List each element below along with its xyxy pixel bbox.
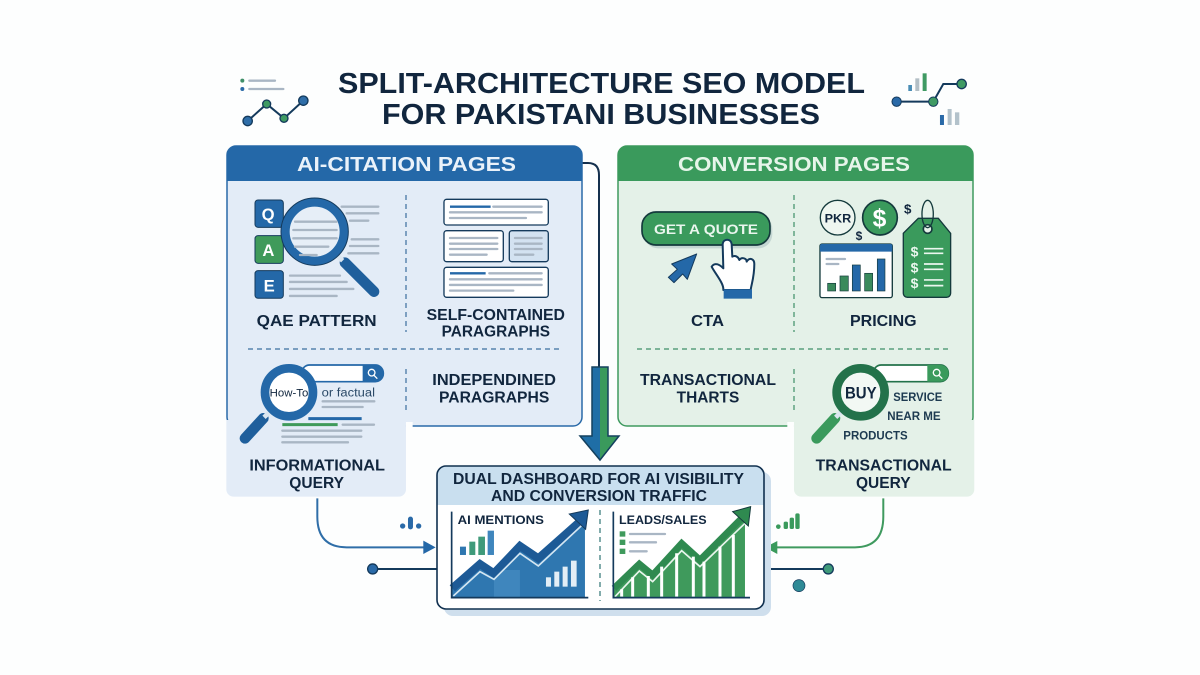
transactional tharts label: THARTS <box>677 389 739 406</box>
result lines <box>282 401 374 442</box>
connector: informational query to dashboard <box>317 498 437 574</box>
magnifier: BUY <box>817 368 885 438</box>
pricing item: PKR <box>825 212 852 226</box>
card: transactional query <box>787 365 974 497</box>
search text: or factual <box>322 386 375 400</box>
panel: conversion pages <box>618 146 973 426</box>
independent paragraphs label: PARAGRAPHS <box>439 389 549 406</box>
transactional tharts label: TRANSACTIONAL <box>640 372 776 389</box>
QAE pattern item: Q <box>262 205 275 224</box>
search bar <box>302 365 384 382</box>
magnifier: BUY: BUY <box>845 383 877 402</box>
CTA item: GET A QUOTE <box>654 221 758 237</box>
self-contained paragraphs item: PARAGRAPHS <box>442 324 550 341</box>
title: SPLIT-ARCHITECTURE SEO MODEL <box>338 68 865 100</box>
search terms: SERVICE <box>893 390 942 404</box>
chart: AI mentions <box>452 510 588 598</box>
pricing item: $ <box>856 229 863 243</box>
label: informational query: QUERY <box>289 475 344 492</box>
search bar <box>873 365 949 382</box>
chart: AI mentions: AI MENTIONS <box>458 513 544 527</box>
title <box>338 68 865 131</box>
label: transactional query <box>816 458 952 492</box>
connector: transactional query to dashboard <box>764 498 883 592</box>
search terms: PRODUCTS <box>843 428 908 442</box>
panel header: conversion pages <box>618 146 973 181</box>
search terms <box>843 390 942 442</box>
label: informational query: INFORMATIONAL <box>249 458 385 475</box>
QAE pattern item: E <box>264 276 275 295</box>
self-contained paragraphs item <box>427 199 565 341</box>
pricing item: $ <box>911 244 919 260</box>
independent paragraphs label: INDEPENDINED <box>432 372 556 389</box>
pricing item: PRICING <box>850 313 917 330</box>
magnifier: How-To <box>245 368 313 438</box>
independent paragraphs label <box>432 372 556 406</box>
QAE pattern item: A <box>262 241 274 260</box>
pricing item: $ <box>911 259 919 275</box>
pricing item: $ <box>904 201 912 216</box>
transactional tharts label <box>640 372 776 406</box>
dashboard header <box>437 466 764 505</box>
magnifier: How-To: How-To <box>270 388 308 400</box>
icon: left network decoration <box>240 79 308 126</box>
CTA item: CTA <box>691 313 724 330</box>
title: FOR PAKISTANI BUSINESSES <box>382 99 820 131</box>
self-contained paragraphs item: SELF-CONTAINED <box>427 307 565 324</box>
label: transactional query: QUERY <box>856 475 911 492</box>
connector: blue panel to central arrow <box>582 163 599 368</box>
QAE pattern item: QAE PATTERN <box>257 313 377 330</box>
search terms: NEAR ME <box>887 409 941 423</box>
dashboard header: AND CONVERSION TRAFFIC <box>491 488 707 505</box>
arrow: central split-colour down arrow <box>580 367 619 460</box>
label: informational query <box>249 458 385 492</box>
icon: right network decoration <box>892 73 966 125</box>
dashboard header: DUAL DASHBOARD FOR AI VISIBILITY <box>453 471 745 488</box>
panel: AI-citation pages <box>227 146 582 426</box>
panel header: conversion pages: CONVERSION PAGES <box>678 154 910 176</box>
divider lines <box>248 195 563 410</box>
chart: leads and sales: LEADS/SALES <box>619 513 707 527</box>
label: transactional query: TRANSACTIONAL <box>816 458 952 475</box>
chart: leads and sales <box>613 507 751 598</box>
CTA item <box>642 212 772 330</box>
pricing item <box>820 200 951 330</box>
panel: dual dashboard <box>437 466 771 616</box>
card: informational query <box>226 365 413 497</box>
pricing item: $ <box>873 206 887 233</box>
panel header: AI-citation pages <box>227 146 582 181</box>
QAE pattern item <box>255 198 378 330</box>
divider lines <box>637 195 952 410</box>
pricing item: $ <box>911 275 919 291</box>
panel header: AI-citation pages: AI-CITATION PAGES <box>297 154 516 176</box>
